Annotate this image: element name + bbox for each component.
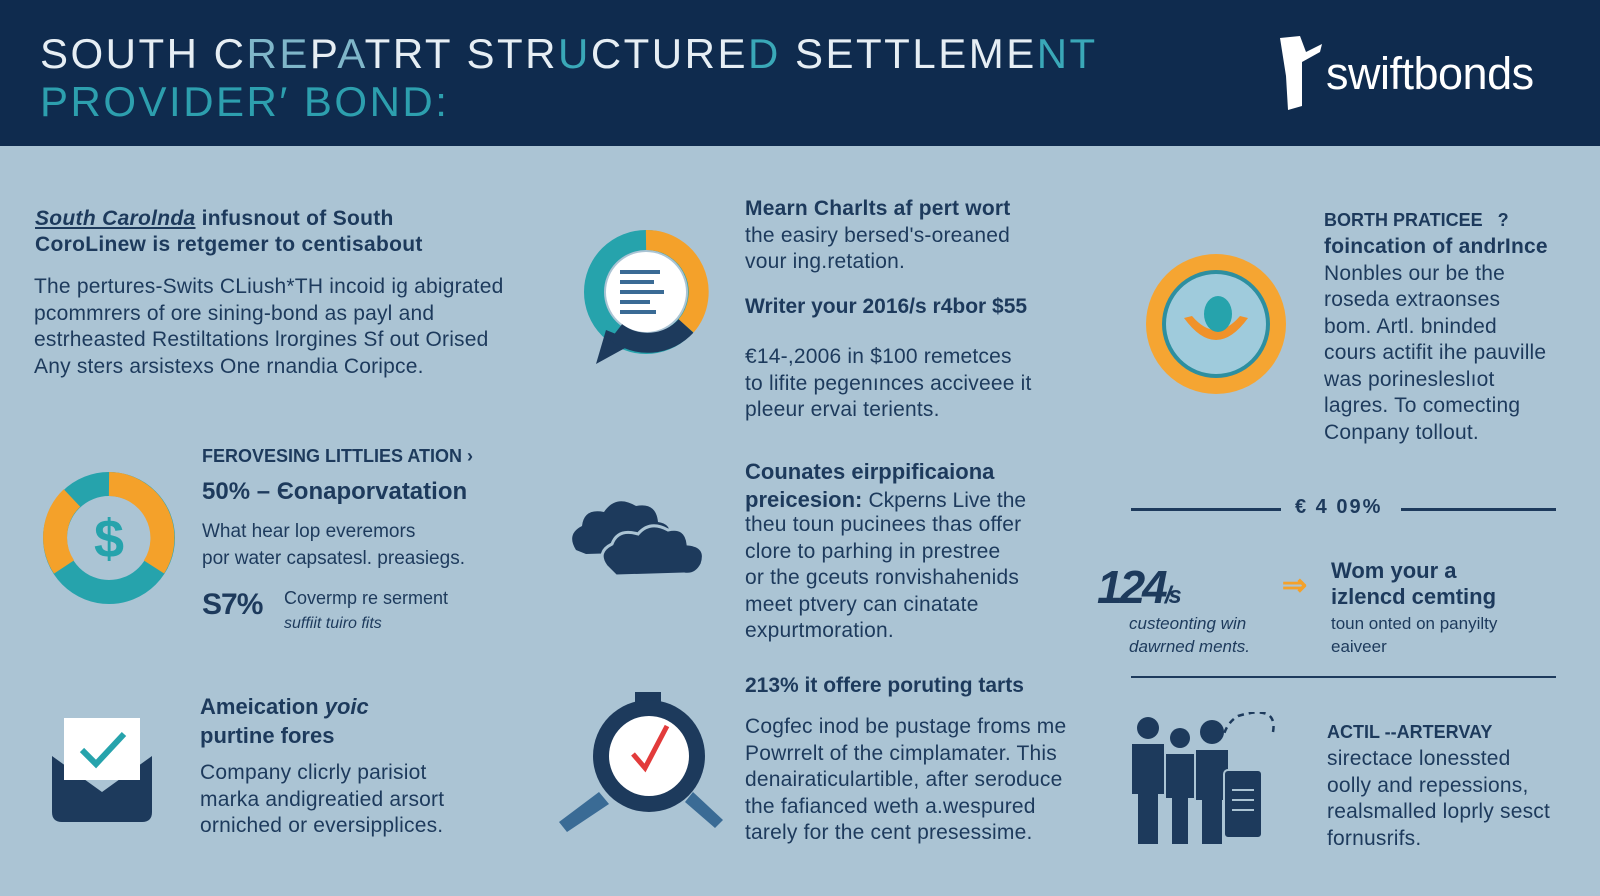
text: wom your a xyxy=(1331,558,1498,656)
panel: stat 50%: Covermp re serment xyxy=(284,588,448,608)
panel: middle mid: preicesion: Ckperns Live the xyxy=(745,487,1026,512)
panel: middle top xyxy=(745,197,1032,421)
header bar xyxy=(0,0,1600,146)
text: wom your a: eaiveer xyxy=(1331,637,1387,656)
panel: middle mid: clore to parhing in prestree xyxy=(745,540,1000,562)
panel: right bottom: ACTIL --ARTERVAY xyxy=(1327,722,1492,742)
panel: left intro: Any sters arsistexs One rnandia Coripce. xyxy=(34,354,424,378)
panel: middle mid: or the gceuts ronvishahenids xyxy=(745,566,1019,589)
logo: swiftbonds xyxy=(1280,36,1534,110)
panel: right top: bom. Artl. bninded xyxy=(1324,314,1497,338)
text: wom your a: Wom your a xyxy=(1331,558,1457,583)
panel: middle bottom: the fafianced weth a.wespured xyxy=(745,794,1036,818)
title: PROVIDER′ BOND: xyxy=(40,78,449,125)
panel: middle top: the easiry bersed's-oreaned xyxy=(745,224,1010,246)
arrow: ⇒ xyxy=(1282,569,1307,602)
panel: stat 50%: What hear lop everemors xyxy=(202,521,415,542)
panel: left intro: estrheasted Restiltations lrorgines Sf out Orised xyxy=(34,328,489,351)
panel: right bottom: realsmalled loprly sesct xyxy=(1327,800,1550,823)
panel: right top: cours actifit ihe pauville xyxy=(1324,341,1546,364)
divider with stat xyxy=(1131,496,1556,518)
panel: stat 50%: S7% xyxy=(202,588,262,621)
icon: people xyxy=(1132,712,1275,844)
panel: middle bottom xyxy=(745,674,1066,844)
panel: middle bottom: tarely for the cent presessime. xyxy=(745,821,1032,844)
panel: right bottom: sirectace lonessted xyxy=(1327,747,1511,770)
panel: stat 50%: 50% – Єonaporvatation xyxy=(202,478,467,505)
panel: middle mid xyxy=(745,459,1026,642)
icon: coin xyxy=(1146,254,1286,394)
panel: middle bottom: denairaticulartible, after seroduce xyxy=(745,768,1063,791)
icon: dollar donut: $ xyxy=(94,509,124,569)
panel: middle bottom: Powrrelt of the cimplamater. This xyxy=(745,742,1057,764)
text: wom your a: izlencd cemting xyxy=(1331,584,1496,609)
panel: middle mid: expurtmoration. xyxy=(745,619,894,642)
panel: middle top: Writer your 2016/s r4bor $55 xyxy=(745,295,1027,318)
stat: 124/s: dawrned ments. xyxy=(1129,637,1250,656)
panel: middle bottom: Cogfec inod be pustage froms me xyxy=(745,715,1066,738)
icon: stopwatch xyxy=(559,692,723,832)
panel: stat 50% xyxy=(202,446,473,632)
panel: ameication: orniched or eversipplices. xyxy=(200,814,443,837)
text: wom your a: toun onted on panyilty xyxy=(1331,614,1497,633)
stat: 124/s: custeonting win xyxy=(1129,614,1246,633)
panel: middle mid: Counates eirppificaiona xyxy=(745,459,994,484)
panel: right top: Conpany tollout. xyxy=(1324,420,1479,444)
panel: middle top: Mearn Charlts af pert wort xyxy=(745,197,1010,220)
panel: ameication xyxy=(200,694,444,837)
panel: middle top: €14-,2006 in $100 remetces xyxy=(745,345,1012,368)
panel: middle top: vour ing.retation. xyxy=(745,250,905,273)
icon: envelope check xyxy=(52,718,152,822)
stat: 124/s: 124/s xyxy=(1097,561,1179,613)
panel: right top: Nonbles our be the xyxy=(1324,262,1505,284)
stat: 124/s xyxy=(1097,561,1250,656)
panel: ameication: Company clicrly parisiot xyxy=(200,761,427,784)
icon: clouds xyxy=(572,501,702,574)
panel: middle mid: meet ptvery can cinatate xyxy=(745,592,979,616)
title xyxy=(40,30,1098,125)
panel: middle bottom: 213% it offere poruting tarts xyxy=(745,674,1024,697)
panel: right top: lagres. To comecting xyxy=(1324,394,1520,417)
panel: left intro: pcommrers of ore sining-bond as payl and xyxy=(34,302,434,324)
icon: dollar donut xyxy=(43,472,175,604)
panel: stat 50%: por water capsatesl. preasiegs. xyxy=(202,548,465,569)
panel: right bottom xyxy=(1327,722,1550,850)
panel: left intro: CoroLinew is retgemer to centisabout xyxy=(35,233,423,256)
panel: right top: BORTH PRATICEE ? xyxy=(1324,210,1509,230)
panel: middle top: pleeur ervai terients. xyxy=(745,398,940,421)
panel: ameication: purtine fores xyxy=(200,723,334,748)
panel: right top: was porinesleslıot xyxy=(1324,368,1495,390)
panel: right bottom: fornusrifs. xyxy=(1327,826,1421,850)
panel: left intro: South Carolnda infusnout of South xyxy=(35,207,394,230)
panel: right bottom: oolly and repessions, xyxy=(1327,774,1528,796)
panel: middle mid: theu toun pucinees thas offer xyxy=(745,513,1021,536)
panel: ameication: marka andigreatied arsort xyxy=(200,788,444,810)
title: SOUTH CREPATRT STRUCTURED SETTLEMENT xyxy=(40,30,1098,77)
panel: stat 50%: FEROVESING LITTLIES ATION › xyxy=(202,446,473,466)
panel: middle top: to lifite pegenınces acciveee it xyxy=(745,372,1032,394)
panel: left intro: The pertures-Swits CLiush*TH incoid ig abigrated xyxy=(34,275,503,298)
panel: right top: roseda extraonses xyxy=(1324,288,1500,311)
panel: right top xyxy=(1324,210,1548,444)
logo: swiftbonds: swiftbonds xyxy=(1326,48,1534,99)
panel: left intro xyxy=(34,207,503,378)
panel: ameication: Ameication yoic xyxy=(200,694,369,719)
panel: right top: foincation of andrInce xyxy=(1324,235,1548,258)
panel: stat 50%: suffiit tuiro fits xyxy=(284,615,382,632)
divider with stat: € 4 09% xyxy=(1295,496,1382,518)
icon: chat donut xyxy=(584,230,709,364)
